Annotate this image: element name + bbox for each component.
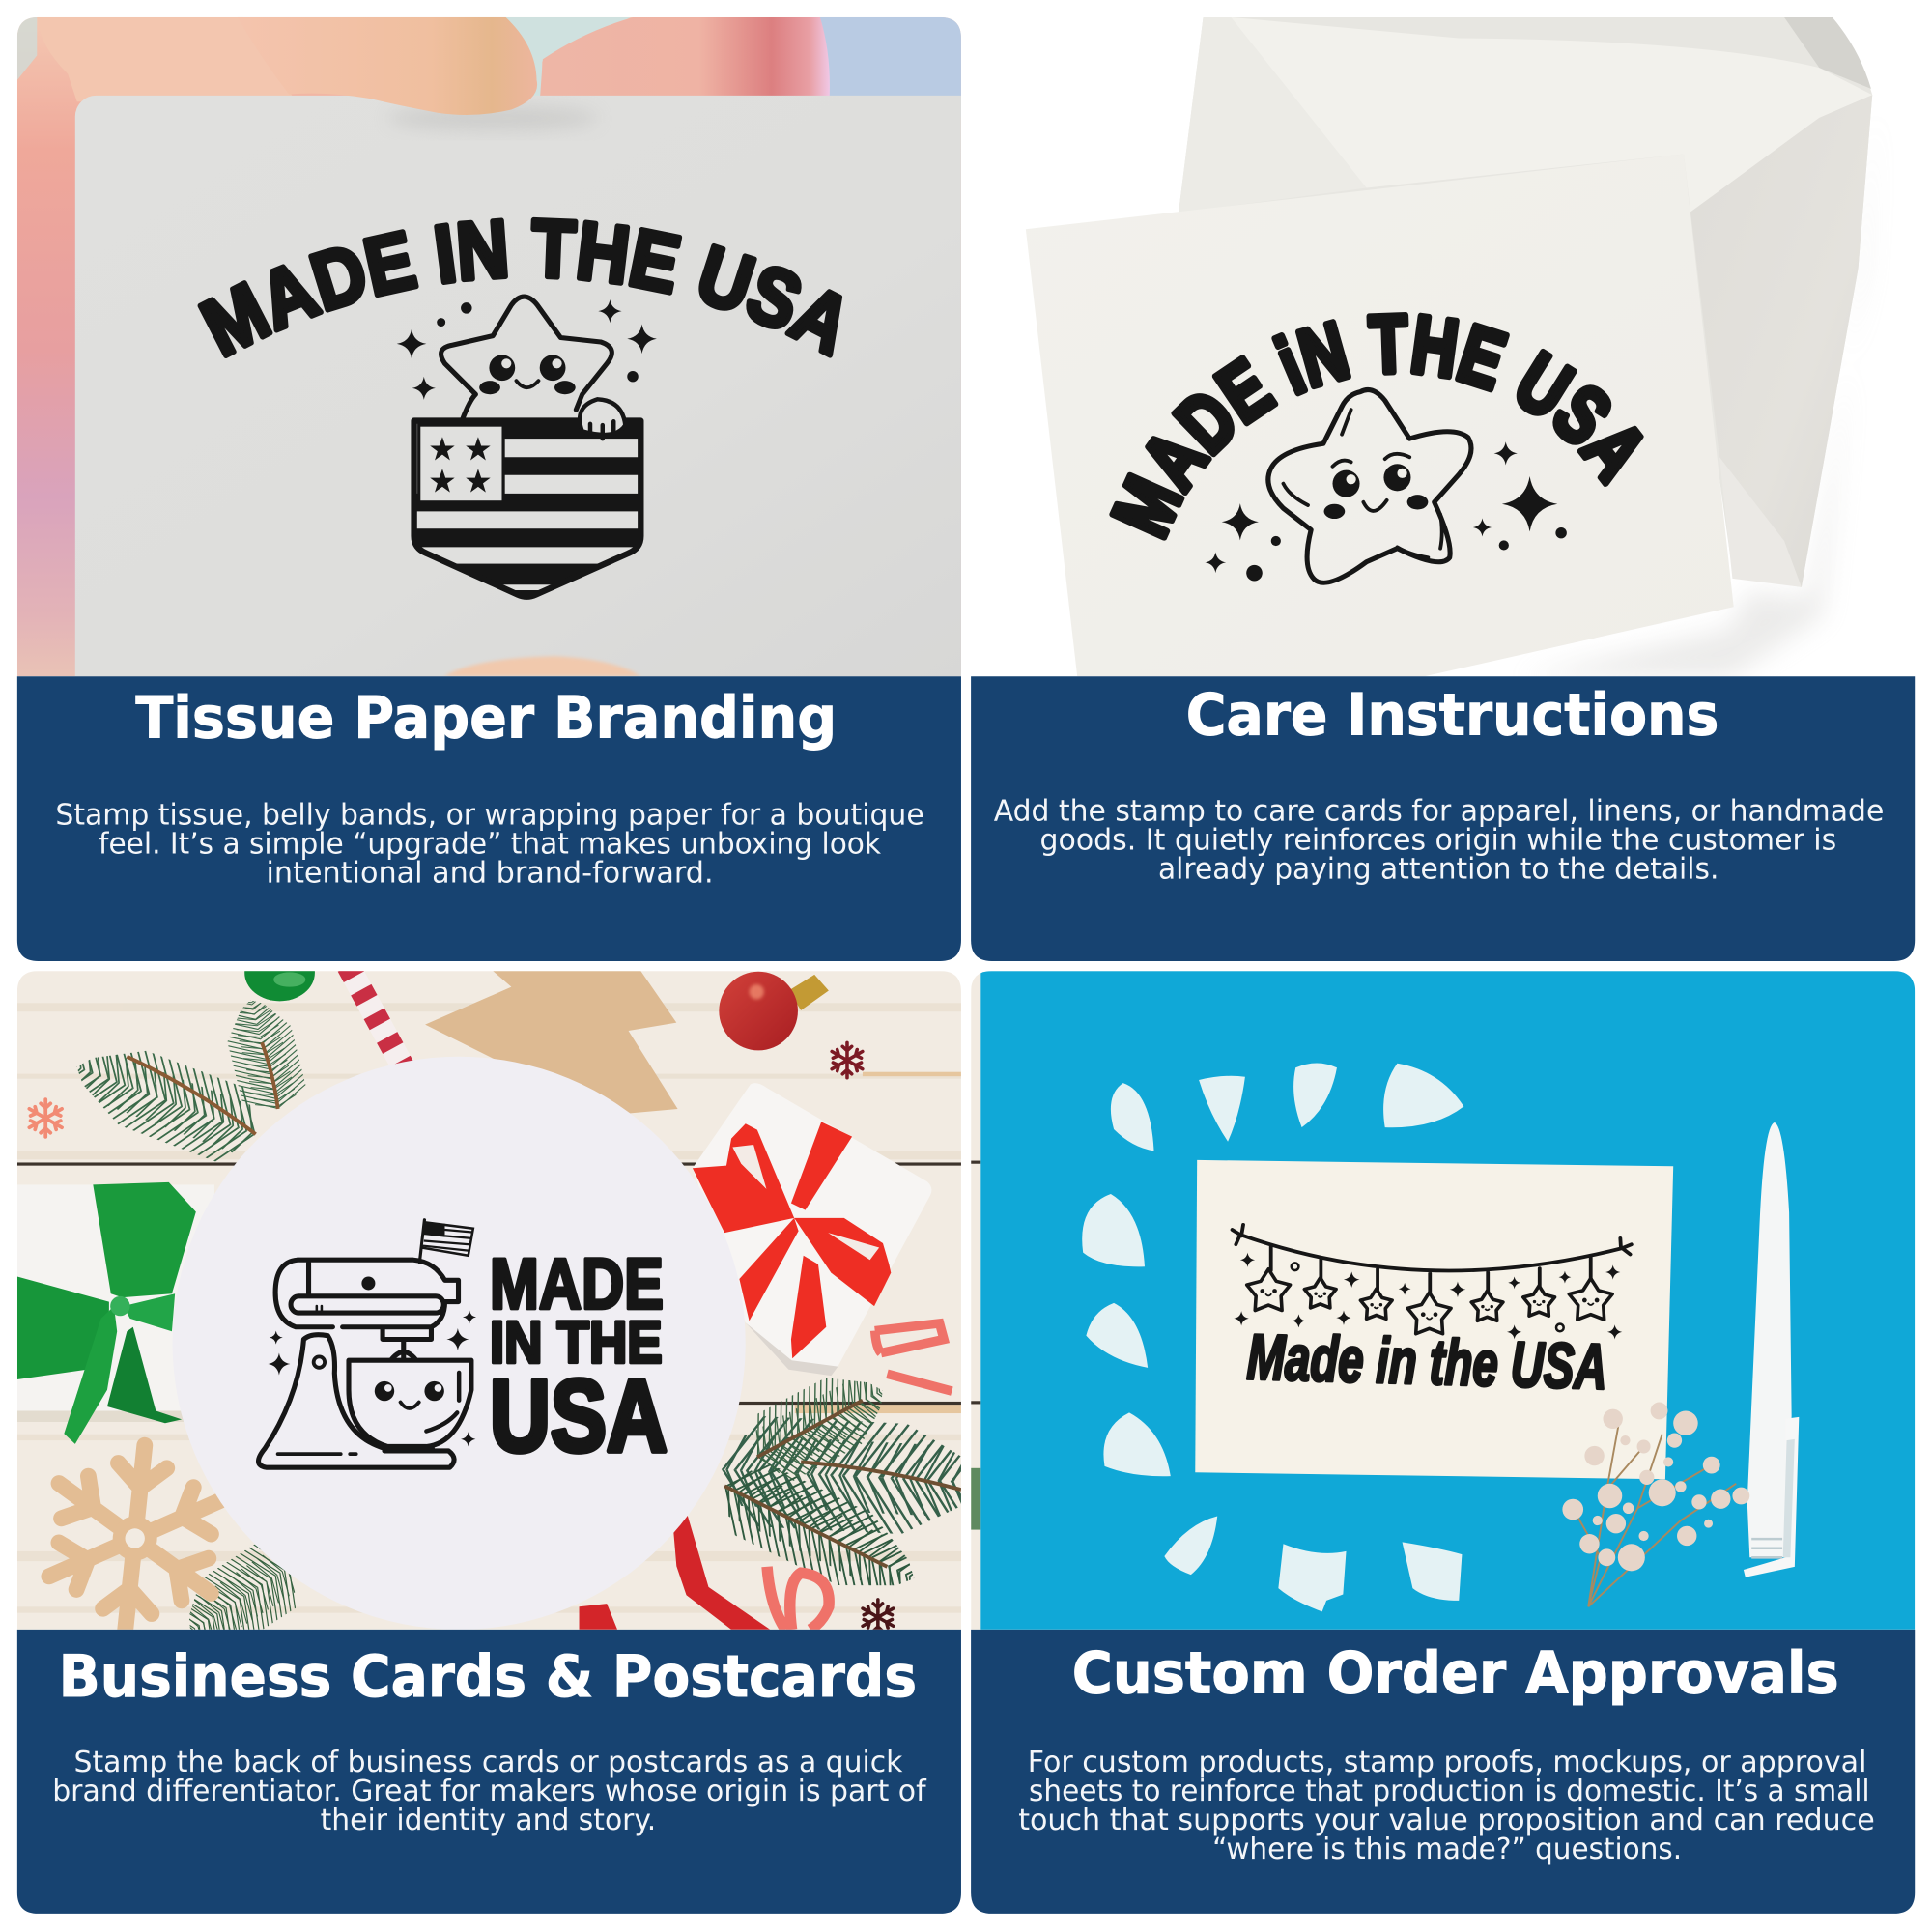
star outline [1268, 389, 1471, 582]
pocket with flag [412, 399, 648, 604]
body text: feel. It’s a simple “upgrade” that makes unboxing look [99, 827, 881, 861]
body text: For custom products, stamp proofs, mockups, or approval [1028, 1746, 1866, 1779]
body text: touch that supports your value proposition and can reduce [1018, 1804, 1875, 1837]
photo: Christmas flat lay [17, 971, 961, 1630]
body text [52, 1746, 927, 1837]
dried flowers [1562, 1403, 1749, 1606]
stamp text: script: Made in the USA [1246, 1321, 1608, 1404]
pine branch top left [76, 1000, 305, 1161]
body text: brand differentiator. Great for makers whose origin is part of [52, 1775, 927, 1808]
stamped card [1195, 1160, 1673, 1479]
hanging stars [1247, 1269, 1612, 1334]
candy cane [348, 966, 404, 1067]
panel: Business Cards & Postcards [17, 945, 1025, 1914]
wood snowflake [44, 1436, 226, 1640]
stamp text lines: MADE [490, 1244, 664, 1324]
heading: Custom Order Approvals [1072, 1640, 1839, 1708]
stamp text: arched: MADE IN THE USA [197, 216, 842, 358]
red bauble [719, 972, 829, 1050]
thumb [278, 17, 537, 115]
caption band [971, 1630, 1915, 1914]
petals [1082, 1063, 1463, 1611]
star face and sparkles [1205, 441, 1567, 581]
pine branch bottom right [721, 1378, 961, 1586]
body text: intentional and brand-forward. [267, 856, 714, 890]
caption band [17, 1630, 961, 1914]
body text: “where is this made?” questions. [1212, 1833, 1682, 1866]
body text: Add the stamp to care cards for apparel, linens, or handmade [994, 795, 1884, 829]
stamp: smiling star [1109, 312, 1644, 585]
sparkles [1234, 1253, 1622, 1340]
body text: already paying attention to the details. [1158, 853, 1719, 887]
gift right [693, 1083, 931, 1376]
body text: their identity and story. [321, 1804, 656, 1837]
mixer face, flag and sparkles [268, 1222, 476, 1446]
heading: Care Instructions [1186, 681, 1719, 749]
star outline [441, 297, 611, 420]
stamp: star in flag pocket [197, 216, 842, 600]
card [1026, 154, 1734, 684]
body text: Stamp tissue, belly bands, or wrapping paper for a boutique [55, 798, 924, 832]
red felt ribbon [580, 1508, 770, 1630]
fingers [540, 17, 830, 101]
stamp: mixer [259, 1220, 668, 1473]
photo: hand holding stamped card [17, 17, 961, 676]
garland string [1233, 1225, 1632, 1293]
card [75, 95, 961, 676]
white round card [173, 1057, 746, 1630]
body text [994, 795, 1884, 887]
envelope back and flap [1179, 17, 1872, 587]
snowflake decorations [29, 1042, 894, 1634]
stamp: star garland [1233, 1225, 1632, 1404]
body text: Stamp the back of business cards or postcards as a quick [74, 1746, 903, 1779]
caption band [971, 676, 1915, 961]
red ribbon [693, 1122, 891, 1358]
photo: stamped card on envelope [1026, 17, 1872, 676]
body text [55, 798, 924, 890]
panel: Tissue Paper Branding [17, 17, 961, 961]
coral curl [767, 1567, 829, 1630]
body text [1018, 1746, 1875, 1866]
panel: Custom Order Approvals [971, 971, 1918, 1914]
heading: Business Cards & Postcards [59, 1643, 917, 1711]
photo: card on blue surface [971, 971, 1918, 1632]
pen [1744, 1122, 1799, 1577]
stamp text lines: IN THE [490, 1310, 663, 1376]
coral ribbon right [875, 1323, 952, 1391]
caption band [17, 676, 961, 961]
stamp text: arched: MADE iN THE USA [1109, 312, 1644, 541]
background behind the fingers [820, 17, 961, 96]
heading: Tissue Paper Branding [135, 684, 837, 752]
mixer outline [259, 1220, 471, 1467]
envelope shadow [1574, 573, 1826, 676]
panel: Care Instructions [971, 17, 1915, 961]
wood tree ornament [425, 971, 678, 1114]
pine branch bottom left [189, 1544, 296, 1630]
stamp text lines: USA [490, 1359, 668, 1473]
star face [397, 299, 657, 400]
green bauble [244, 971, 315, 1001]
stamp text lines [490, 1244, 668, 1473]
body text: sheets to reinforce that production is domestic. It’s a small [1029, 1775, 1870, 1808]
gift left [17, 1182, 214, 1444]
body text: goods. It quietly reinforces origin while the customer is [1040, 824, 1836, 858]
